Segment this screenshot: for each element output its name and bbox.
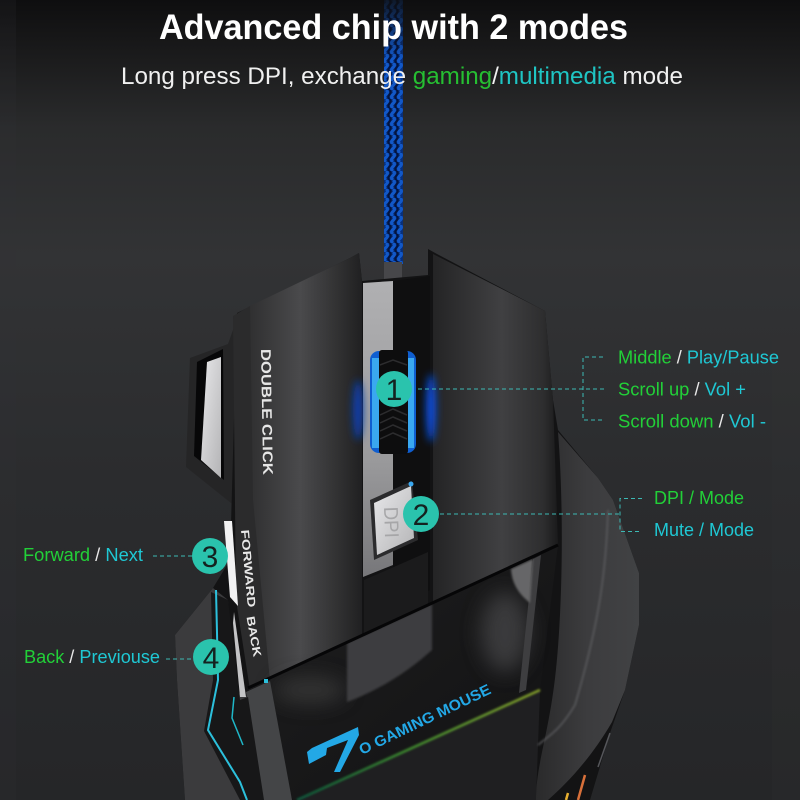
left wing edge strip [233,306,270,690]
number badge 1 [376,371,412,407]
lower shell [297,690,540,800]
inner light line [232,697,243,745]
forward and back silver buttons [224,521,246,697]
right grip [536,432,639,800]
label: scroll up / vol +: Scroll up / Vol + [618,380,746,400]
connector line for callout 4 [166,658,193,660]
connector line for callout 3 [153,555,192,557]
body silhouette [175,249,639,800]
cyan light line [208,590,247,800]
palm highlight centre [347,604,432,702]
connector lines for callout 2 [440,498,642,532]
right wing panel [433,254,558,603]
side double-click button [186,316,240,505]
palm wedge highlight right [511,559,533,603]
subtitle: Long press DPI, exchange gaming/multimedia mode [121,63,683,90]
usb cable [384,0,403,280]
scroll wheel [353,350,436,454]
number badge 2: 2 [413,499,429,532]
grey palm edge band [246,681,292,800]
forward back printed label: FORWARD [238,529,257,608]
forward back printed label: BACK [244,615,263,659]
number badge 4 [193,639,229,675]
double click printed label: DOUBLE CLICK [258,349,276,475]
center silver strip [363,281,393,577]
cyan indicator dot [264,679,268,683]
palm band right [519,555,541,693]
forward back printed label [238,529,263,659]
number badge 1: 1 [386,374,402,407]
label: forward / next: Forward / Next [23,545,143,565]
title: Advanced chip with 2 modes [159,8,628,47]
label: scroll down / vol -: Scroll down / Vol - [618,412,766,432]
mouse body [175,249,639,800]
number badge 2 [403,496,439,532]
grip seam [538,510,608,745]
left wing panel [250,253,362,681]
label: middle / play pause: Middle / Play/Pause [618,348,779,368]
palm shell [248,545,558,800]
center dark strip [393,276,430,610]
number badge 4: 4 [203,642,219,675]
number badge 3 [192,538,228,574]
label: back / previouse: Back / Previouse [24,647,160,667]
number badge 3: 3 [202,541,218,574]
green light bar [297,690,540,800]
label: dpi / mode: DPI / Mode [654,488,744,508]
divider line [248,545,558,688]
dpi button: DPI [379,506,402,538]
logo 7D gaming mouse: O GAMING MOUSE [356,681,494,759]
palm left glow [274,676,346,704]
dark block beneath center [364,552,428,634]
logo 7D gaming mouse [307,681,494,772]
left side grip with light line [175,588,264,800]
rainbow light streaks [566,733,610,800]
palm soft glow [481,592,529,672]
label: mute / mode: Mute / Mode [654,520,754,540]
connector lines for callout 1 [418,357,605,420]
dpi button [370,481,418,560]
